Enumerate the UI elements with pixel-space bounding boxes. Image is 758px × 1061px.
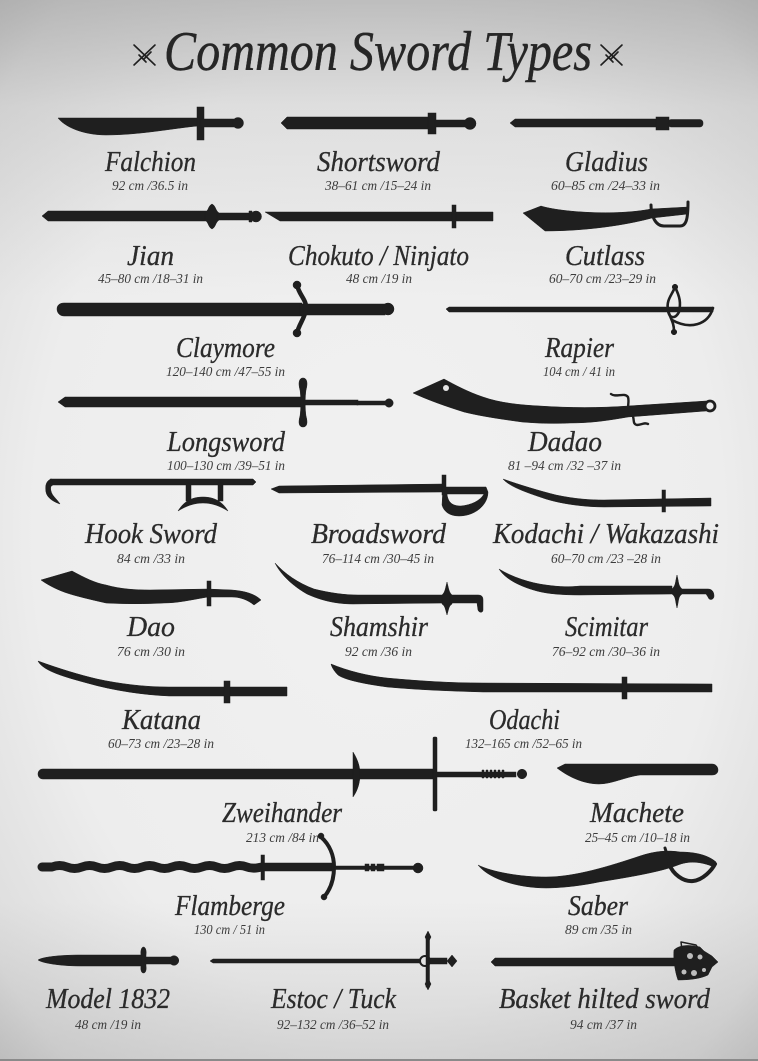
icon: flamberge — [42, 833, 423, 900]
icon: dadao — [413, 379, 715, 425]
name: Rapier — [544, 333, 614, 364]
panel: Model 1832 — [38, 947, 179, 1032]
heading text: Common Sword Types — [164, 21, 592, 83]
panel: Longsword — [58, 378, 393, 473]
size: 81 –94 cm /32 –37 in — [508, 458, 621, 473]
icon: cutlass — [523, 202, 688, 231]
icon: basket hilted sword — [491, 942, 718, 980]
icon: shortsword — [281, 113, 476, 134]
icon: zweihander — [38, 737, 527, 811]
title — [134, 21, 622, 83]
icon: shamshir — [275, 563, 483, 615]
panel: Saber — [478, 848, 716, 937]
size: 104 cm / 41 in — [543, 364, 615, 379]
panel: Gladius — [510, 117, 703, 193]
size: 48 cm /19 in — [346, 271, 412, 286]
panel: Katana — [38, 661, 287, 751]
icon: chokuto — [265, 205, 493, 228]
size: 132–165 cm /52–65 in — [465, 736, 582, 751]
icon: saber — [478, 848, 716, 888]
panel: Hook Sword — [46, 479, 256, 566]
size: 76–92 cm /30–36 in — [552, 644, 660, 659]
icon: hook sword — [46, 479, 256, 511]
icon: broadsword — [271, 475, 488, 516]
name: Dadao — [527, 427, 602, 458]
icon: crossed swords left — [134, 45, 155, 65]
icon: crossed swords right — [601, 45, 622, 65]
icon: longsword — [58, 378, 393, 427]
name: Cutlass — [565, 241, 645, 272]
name: Flamberge — [174, 891, 285, 922]
name: Chokuto / Ninjato — [288, 241, 469, 272]
size: 60–70 cm /23–29 in — [549, 271, 656, 286]
size: 120–140 cm /47–55 in — [166, 364, 285, 379]
name: Broadsword — [311, 519, 447, 550]
icon: scimitar — [499, 569, 714, 608]
name: Falchion — [104, 147, 196, 178]
icon: falchion — [58, 107, 244, 140]
name: Machete — [589, 798, 684, 829]
size: 130 cm / 51 in — [194, 922, 265, 937]
size: 92 cm /36 in — [345, 644, 412, 659]
panel: Machete — [557, 764, 718, 845]
panel: Shamshir — [275, 563, 483, 659]
icon: model 1832 sword — [38, 947, 179, 973]
panel: Flamberge — [42, 833, 423, 937]
size: 89 cm /35 in — [565, 922, 632, 937]
size: 213 cm /84 in — [246, 830, 319, 845]
size: 84 cm /33 in — [117, 551, 185, 566]
name: Estoc / Tuck — [270, 984, 397, 1015]
size: 60–70 cm /23 –28 in — [551, 551, 661, 566]
name: Kodachi / Wakazashi — [492, 519, 719, 550]
name: Gladius — [565, 147, 648, 178]
size: 45–80 cm /18–31 in — [98, 271, 203, 286]
icon: claymore — [57, 281, 394, 337]
panel: Zweihander — [38, 737, 527, 845]
name: Dao — [126, 612, 175, 643]
name: Saber — [568, 891, 628, 922]
size: 76–114 cm /30–45 in — [322, 551, 434, 566]
size: 38–61 cm /15–24 in — [324, 178, 431, 193]
name: Shortsword — [317, 147, 441, 178]
panel: Dao — [41, 571, 261, 659]
panel: Scimitar — [499, 569, 714, 659]
panel: Odachi — [331, 664, 712, 751]
name: Longsword — [166, 427, 286, 458]
icon: kodachi — [503, 479, 711, 512]
name: Odachi — [489, 705, 560, 736]
panel: Kodachi / Wakazashi — [492, 479, 719, 566]
size: 92 cm /36.5 in — [112, 178, 188, 193]
panel: Falchion — [58, 107, 244, 193]
icon: gladius — [510, 117, 703, 130]
size: 25–45 cm /10–18 in — [585, 830, 690, 845]
name: Jian — [127, 241, 174, 272]
icon: katana — [38, 661, 287, 703]
size: 100–130 cm /39–51 in — [167, 458, 285, 473]
name: Basket hilted sword — [499, 984, 711, 1015]
name: Zweihander — [222, 798, 342, 829]
panel: Broadsword — [271, 475, 488, 566]
size: 60–73 cm /23–28 in — [108, 736, 214, 751]
size: 60–85 cm /24–33 in — [551, 178, 660, 193]
panel: Shortsword — [281, 113, 476, 193]
panel: Jian — [42, 204, 262, 286]
panel: Claymore — [57, 281, 394, 379]
panel: Chokuto / Ninjato — [265, 205, 493, 286]
size: 48 cm /19 in — [75, 1017, 141, 1032]
panel: Dadao — [413, 379, 715, 473]
panel: Rapier — [446, 284, 713, 379]
panel: Estoc / Tuck — [210, 931, 457, 1032]
panel: Cutlass — [523, 202, 688, 286]
icon: rapier — [446, 284, 713, 335]
icon: dao — [41, 571, 261, 606]
size: 92–132 cm /36–52 in — [277, 1017, 389, 1032]
icon: odachi — [331, 664, 712, 699]
panel: Basket hilted sword — [491, 942, 718, 1032]
name: Scimitar — [565, 612, 648, 643]
icon: jian — [42, 204, 262, 229]
name: Claymore — [176, 333, 275, 364]
name: Shamshir — [330, 612, 428, 643]
icon: estoc — [210, 931, 457, 990]
icon: machete — [557, 764, 718, 784]
size: 94 cm /37 in — [570, 1017, 637, 1032]
name: Katana — [121, 705, 201, 736]
name: Hook Sword — [84, 519, 218, 550]
name: Model 1832 — [45, 984, 170, 1015]
size: 76 cm /30 in — [117, 644, 185, 659]
